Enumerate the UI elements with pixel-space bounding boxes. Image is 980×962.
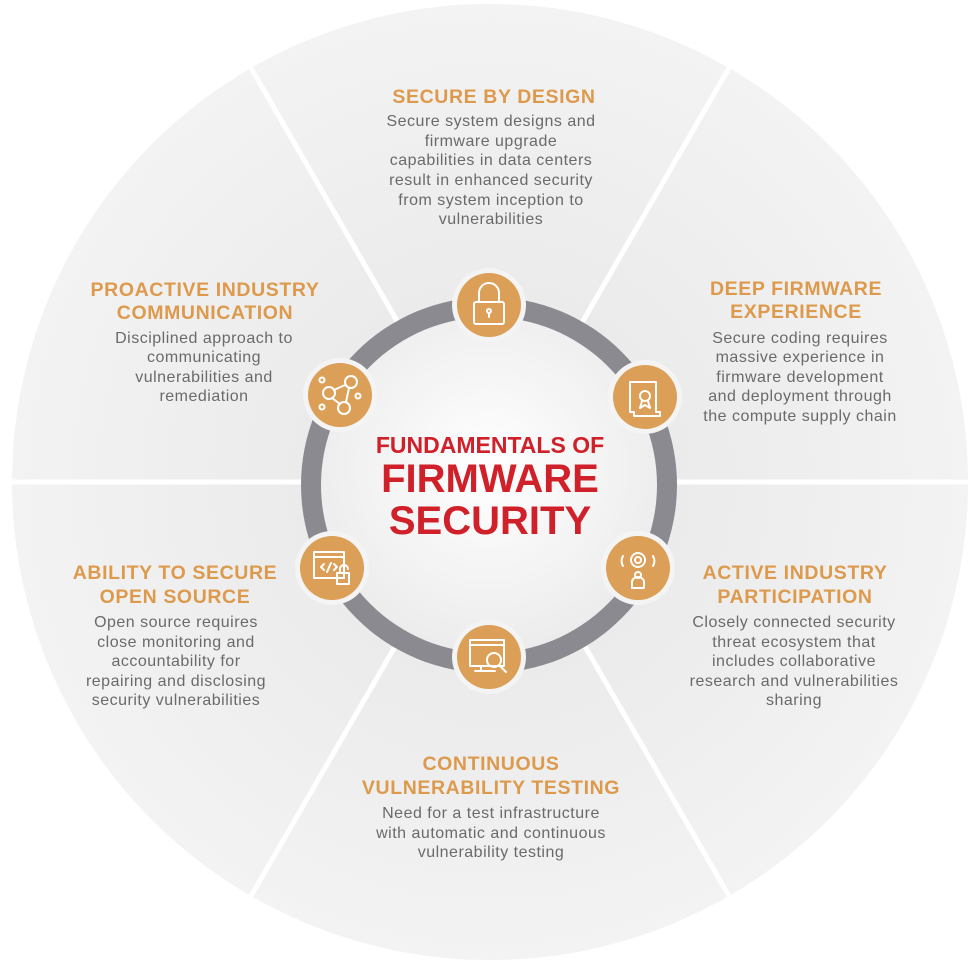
text: deep firmware experience: EXPERIENCE: [730, 301, 862, 323]
text: active industry participation: includes collaborative: [712, 653, 876, 670]
center title: FIRMWARE: [381, 457, 599, 501]
icon: code unlock: [295, 531, 369, 605]
text: ability to secure open source: security vulnerabilities: [92, 692, 260, 709]
icon: people gear: [601, 531, 675, 605]
text: secure by design: [386, 86, 596, 228]
text: secure by design: capabilities in data centers: [390, 152, 592, 169]
text: active industry participation: research and vulnerabilities: [690, 673, 898, 690]
text: continuous vulnerability testing: CONTINUOUS: [422, 753, 560, 775]
text: active industry participation: threat ecosystem that: [712, 634, 876, 651]
text: proactive industry communication: COMMUNICATION: [117, 302, 293, 324]
text: deep firmware experience: and deployment through: [708, 388, 892, 405]
text: ability to secure open source: Open source requires: [94, 614, 258, 631]
text: active industry participation: PARTICIPATION: [717, 586, 873, 608]
text: continuous vulnerability testing: [362, 753, 620, 861]
text: deep firmware experience: Secure coding requires: [712, 330, 888, 347]
text: active industry participation: ACTIVE INDUSTRY: [703, 562, 887, 584]
text: continuous vulnerability testing: VULNERABILITY TESTING: [362, 777, 620, 799]
icon: network people: [303, 358, 377, 432]
text: secure by design: firmware upgrade: [425, 133, 557, 150]
icon: monitor search: [452, 620, 526, 694]
text: secure by design: SECURE BY DESIGN: [392, 86, 596, 108]
text: ability to secure open source: [73, 562, 277, 709]
text: active industry participation: [690, 562, 898, 709]
text: continuous vulnerability testing: vulnerability testing: [418, 844, 564, 861]
text: deep firmware experience: massive experience in: [716, 349, 884, 366]
text: deep firmware experience: [703, 278, 897, 425]
text: continuous vulnerability testing: Need for a test infrastructure: [382, 805, 600, 822]
text: proactive industry communication: [91, 279, 319, 405]
text: secure by design: from system inception to: [398, 192, 584, 209]
text: deep firmware experience: the compute supply chain: [703, 408, 897, 425]
text: active industry participation: Closely connected security: [692, 614, 896, 631]
text: secure by design: vulnerabilities: [439, 211, 543, 228]
text: proactive industry communication: vulnerabilities and: [135, 369, 273, 386]
text: ability to secure open source: OPEN SOURCE: [100, 586, 250, 608]
text: proactive industry communication: remediation: [159, 388, 249, 405]
text: ability to secure open source: repairing and disclosing: [86, 673, 266, 690]
icon: certificate scroll: [608, 360, 682, 434]
center title: [376, 432, 604, 543]
text: deep firmware experience: DEEP FIRMWARE: [710, 278, 882, 300]
text: ability to secure open source: close monitoring and: [97, 634, 255, 651]
text: secure by design: Secure system designs and: [386, 113, 596, 130]
text: secure by design: result in enhanced security: [389, 172, 593, 189]
text: ability to secure open source: ABILITY TO SECURE: [73, 562, 277, 584]
text: active industry participation: sharing: [766, 692, 822, 709]
text: continuous vulnerability testing: with automatic and continuous: [375, 825, 606, 842]
center title: SECURITY: [389, 499, 591, 543]
text: deep firmware experience: firmware development: [716, 369, 884, 386]
text: ability to secure open source: accountability for: [111, 653, 241, 670]
icon: lock: [452, 268, 526, 342]
text: proactive industry communication: communicating: [147, 349, 261, 366]
text: proactive industry communication: PROACTIVE INDUSTRY: [91, 279, 319, 301]
text: proactive industry communication: Disciplined approach to: [115, 330, 293, 347]
center title: FUNDAMENTALS OF: [376, 432, 604, 458]
inner ring: [301, 297, 677, 673]
